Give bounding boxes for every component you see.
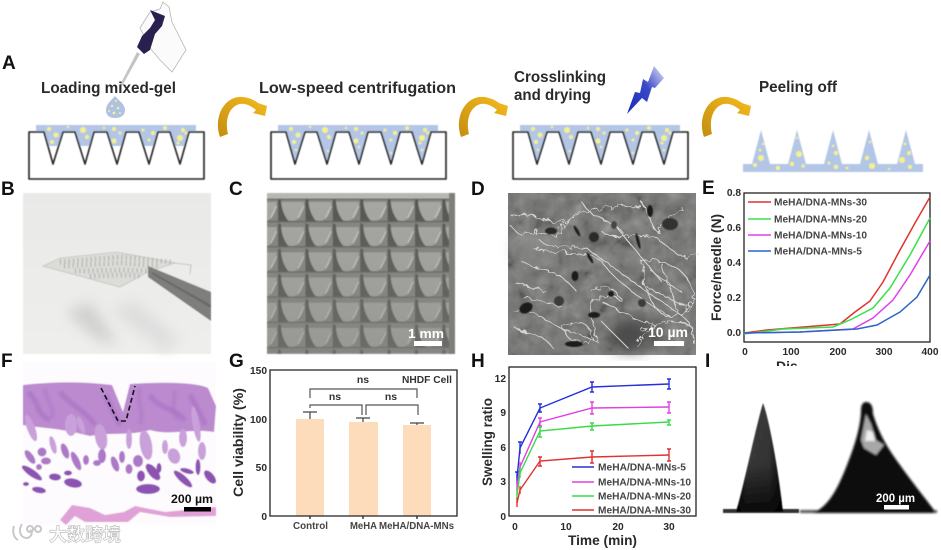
panel I: micrographs of needles: [705, 351, 937, 513]
x axis title: Time (min): [568, 532, 637, 548]
watermark text: 大数跨境: [49, 524, 121, 545]
tick labels: 50: [256, 463, 267, 474]
curve MeHA/DNA-MNs-10: [744, 241, 930, 333]
tick labels: [250, 366, 267, 523]
tick labels: 3: [500, 477, 506, 488]
peeled microneedle patch: [743, 130, 923, 172]
photo B: [23, 193, 211, 354]
x labels: Control: [293, 521, 328, 532]
SEM image D: [508, 193, 696, 355]
tick labels: 0: [742, 347, 748, 358]
series MeHA/DNA-MNs-10: [517, 402, 671, 491]
SEM image C: [267, 193, 455, 354]
title: crosslinking and drying: Crosslinking: [514, 69, 606, 86]
label A: A: [2, 53, 16, 74]
icon: gel drop: [106, 96, 125, 118]
label E: E: [702, 178, 715, 199]
panel A: fabrication workflow: [2, 2, 923, 179]
needle before swelling: [723, 403, 799, 513]
label G: G: [229, 351, 244, 372]
tick labels: 10: [560, 522, 572, 533]
label D: D: [471, 179, 485, 200]
significance brackets: ns: [385, 391, 397, 403]
label C: C: [229, 179, 243, 200]
annotation NHDF Cell: NHDF Cell: [402, 375, 452, 386]
tick labels: 30: [663, 522, 675, 533]
panel E: force displacement chart: [702, 178, 939, 374]
tick labels: 400: [922, 347, 939, 358]
panel F: histology section: [1, 351, 218, 525]
mold 2: gel filled: [271, 125, 446, 179]
panel D: SEM of gel surface: [471, 179, 696, 355]
mold 1: gel on top: [29, 125, 204, 179]
watermark: [13, 524, 121, 545]
panel B: photo of patch with tweezers: [1, 179, 211, 354]
legend: MeHA/DNA-MNs-20: [774, 214, 867, 226]
legend: MeHA/DNA-MNs-5: [598, 462, 686, 474]
plot frame: [509, 367, 696, 516]
label F: F: [1, 351, 13, 372]
series MeHA/DNA-MNs-20: [517, 420, 671, 499]
histology image: [20, 362, 218, 525]
y axis title: Swelling ratio: [479, 398, 495, 486]
tick labels: 0: [512, 522, 518, 533]
y axis title: Force/needle (N): [708, 214, 724, 321]
significance brackets: [310, 374, 418, 415]
icon: lightning bolt: [627, 66, 664, 114]
tick labels: 100: [250, 415, 267, 426]
panel C: SEM of needle array: [229, 179, 455, 354]
tick labels: 9: [500, 408, 506, 419]
panel G: cell viability bar chart: [229, 351, 457, 532]
legend: [572, 462, 691, 516]
tick labels: [727, 188, 939, 358]
panel H: swelling ratio chart: [471, 351, 696, 548]
tick labels: 0.6: [727, 223, 741, 234]
series MeHA/DNA-MNs-5: [515, 379, 671, 484]
significance brackets: ns: [329, 391, 341, 403]
clipped x axis title: Dis: [776, 358, 798, 374]
tick labels: 0.8: [727, 188, 741, 199]
title: crosslinking and drying: and drying: [514, 87, 591, 104]
label H: H: [471, 351, 485, 372]
plot frame: [270, 370, 457, 519]
title: loading mixed-gel: Loading mixed-gel: [41, 80, 176, 97]
curve MeHA/DNA-MNs-5: [744, 275, 930, 333]
title: low-speed centrifugation: Low-speed centrifugation: [259, 80, 456, 97]
needle after swelling: [800, 402, 937, 513]
legend: MeHA/DNA-MNs-5: [774, 246, 862, 258]
scale bar 1 mm: 1 mm: [408, 326, 444, 341]
curve MeHA/DNA-MNs-20: [744, 218, 930, 334]
dashed needle track outline: [101, 386, 135, 421]
significance brackets: ns: [357, 374, 369, 386]
tick labels: 0.4: [727, 258, 741, 269]
legend: MeHA/DNA-MNs-10: [598, 478, 691, 488]
tick labels: 200: [830, 347, 847, 358]
scale bar 10 µm: 10 µm: [648, 325, 688, 340]
x labels: MeHA/DNA-MNs: [379, 521, 454, 532]
x labels: MeHA: [350, 521, 377, 532]
scale bar 200 µm: 200 µm: [876, 493, 915, 505]
tick labels: 12: [495, 374, 506, 385]
scale bar 200 µm: 200 µm: [171, 492, 213, 506]
tick labels: 0: [261, 512, 267, 523]
mold 3: crosslinked: [513, 125, 688, 179]
arrow 1: [218, 97, 267, 137]
tick labels: 150: [250, 366, 267, 377]
tick labels: 0.0: [727, 328, 741, 339]
legend: [748, 198, 867, 258]
x labels: [293, 521, 454, 532]
title: peeling off: Peeling off: [759, 79, 838, 96]
tick labels: [495, 374, 675, 533]
tick labels: 100: [782, 347, 800, 358]
icon: gloved hand with pipette: [120, 2, 186, 86]
legend: MeHA/DNA-MNs-30: [598, 506, 691, 516]
tick labels: 0.2: [727, 293, 741, 304]
y axis title: Cell viability (%): [230, 388, 246, 497]
curve MeHA/DNA-MNs-30: [744, 197, 930, 333]
tick labels: 300: [876, 347, 893, 358]
watermark logo: [13, 524, 41, 540]
title: crosslinking and drying: [514, 69, 606, 104]
tick labels: 0: [500, 512, 506, 523]
tick labels: 20: [612, 522, 624, 533]
tick labels: 6: [500, 443, 506, 454]
series MeHA/DNA-MNs-30: [517, 449, 671, 507]
scale bar 10 µm: [648, 325, 688, 346]
legend: MeHA/DNA-MNs-20: [598, 492, 691, 502]
label I: I: [705, 351, 710, 372]
arrow 2: [459, 97, 508, 137]
legend: MeHA/DNA-MNs-30: [774, 198, 867, 208]
arrow 3: [702, 97, 751, 137]
legend: MeHA/DNA-MNs-10: [774, 230, 867, 242]
bars with error bars: [296, 412, 431, 516]
plot frame: [744, 193, 930, 342]
label B: B: [1, 179, 15, 200]
